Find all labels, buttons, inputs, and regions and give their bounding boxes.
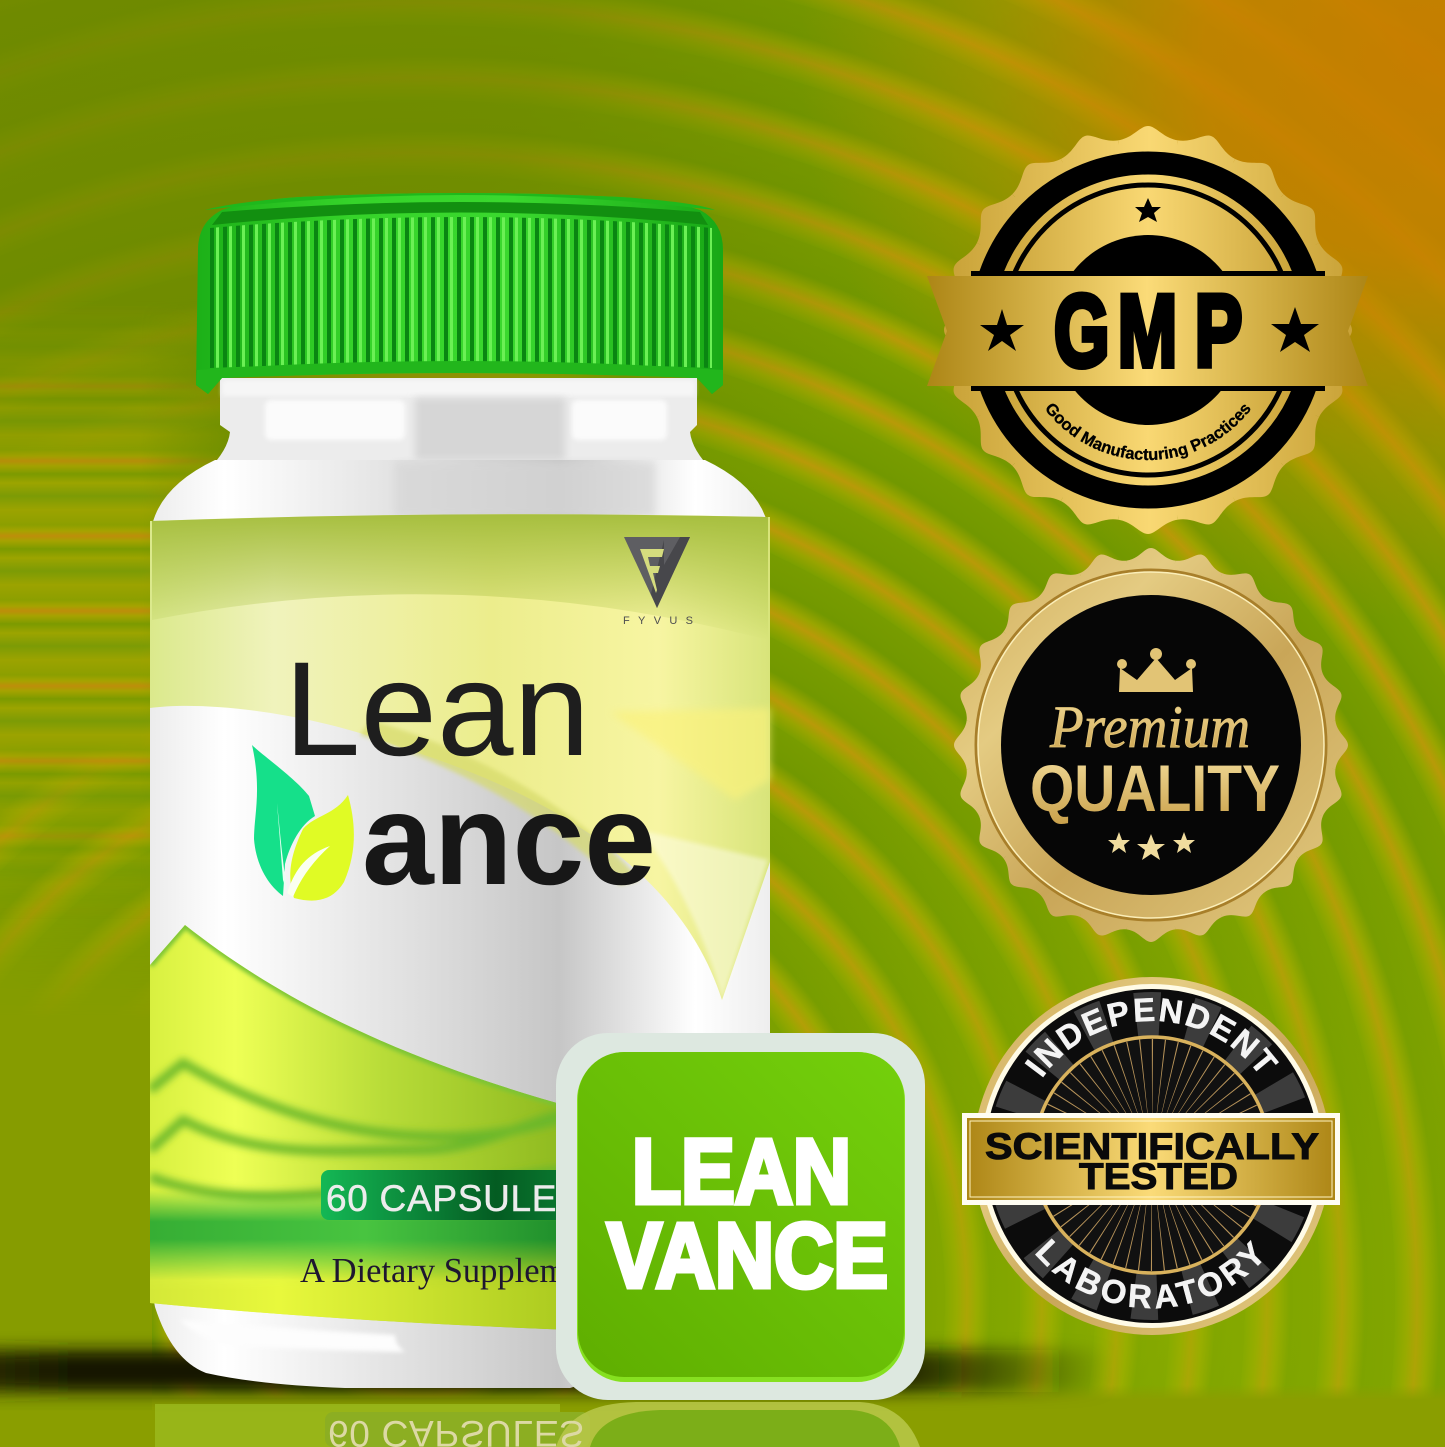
background: plain olive lower left bbox=[0, 820, 152, 1410]
sticker: Lean Vance: VANCE bbox=[607, 1205, 888, 1307]
bottle reflection bbox=[155, 1402, 920, 1447]
sunburst rays bbox=[1082, 1085, 1222, 1225]
bottle body bbox=[150, 460, 770, 1388]
label upper tint bbox=[150, 514, 770, 1000]
brand logo Lean Vance: ance bbox=[362, 766, 656, 912]
dietary supplement line: A Dietary Supplement bbox=[300, 1252, 609, 1290]
sticker: Lean Vance: LEAN bbox=[632, 1121, 851, 1223]
label lower green wave bbox=[150, 925, 580, 1335]
INDEPENDENT arc: INDEPENDENT bbox=[1024, 998, 1279, 1078]
icon: top star bbox=[1135, 198, 1161, 222]
icon: three stars bbox=[1108, 832, 1195, 860]
capsule count pill: 60 CAPSULES bbox=[326, 1178, 583, 1219]
GMP heading: GMP bbox=[1054, 273, 1242, 388]
seal bbox=[954, 548, 1348, 942]
seal bbox=[944, 126, 1352, 534]
floor shadow bbox=[0, 1350, 1110, 1392]
bottle foot highlight bbox=[180, 1320, 405, 1352]
GMP arc caption: Good Manufacturing Practices bbox=[1046, 404, 1250, 460]
LABORATORY arc: LABORATORY bbox=[1035, 1238, 1262, 1309]
brand logo Lean Vance bbox=[252, 635, 656, 912]
bottle neck bbox=[208, 378, 712, 470]
QUALITY heading: QUALITY bbox=[1030, 751, 1280, 825]
badge: Scientifically Tested bbox=[962, 977, 1340, 1335]
badge: GMP bbox=[927, 126, 1368, 534]
icon: right star bbox=[1271, 307, 1319, 352]
icon: left star bbox=[980, 309, 1024, 351]
FYVUS maker logo: FYVUS bbox=[623, 615, 693, 627]
banner: TESTED bbox=[1079, 1156, 1238, 1197]
FYVUS maker logo bbox=[623, 537, 693, 627]
bottle cap bbox=[196, 193, 723, 394]
icon: crown bbox=[1117, 648, 1196, 692]
banner bbox=[962, 1113, 1340, 1205]
banner: SCIENTIFICALLY bbox=[985, 1126, 1319, 1167]
ribbon bbox=[927, 276, 1368, 386]
badge: Premium Quality bbox=[954, 548, 1348, 942]
icon: green leaf bbox=[252, 745, 315, 896]
Premium script: Premium bbox=[1049, 694, 1250, 760]
sticker: Lean Vance bbox=[556, 1033, 925, 1400]
icon: yellow leaf bbox=[290, 795, 354, 901]
bottle bbox=[150, 193, 770, 1388]
background: flat stripes at left edge bbox=[0, 354, 220, 876]
brand logo Lean Vance: Lean bbox=[284, 635, 590, 784]
